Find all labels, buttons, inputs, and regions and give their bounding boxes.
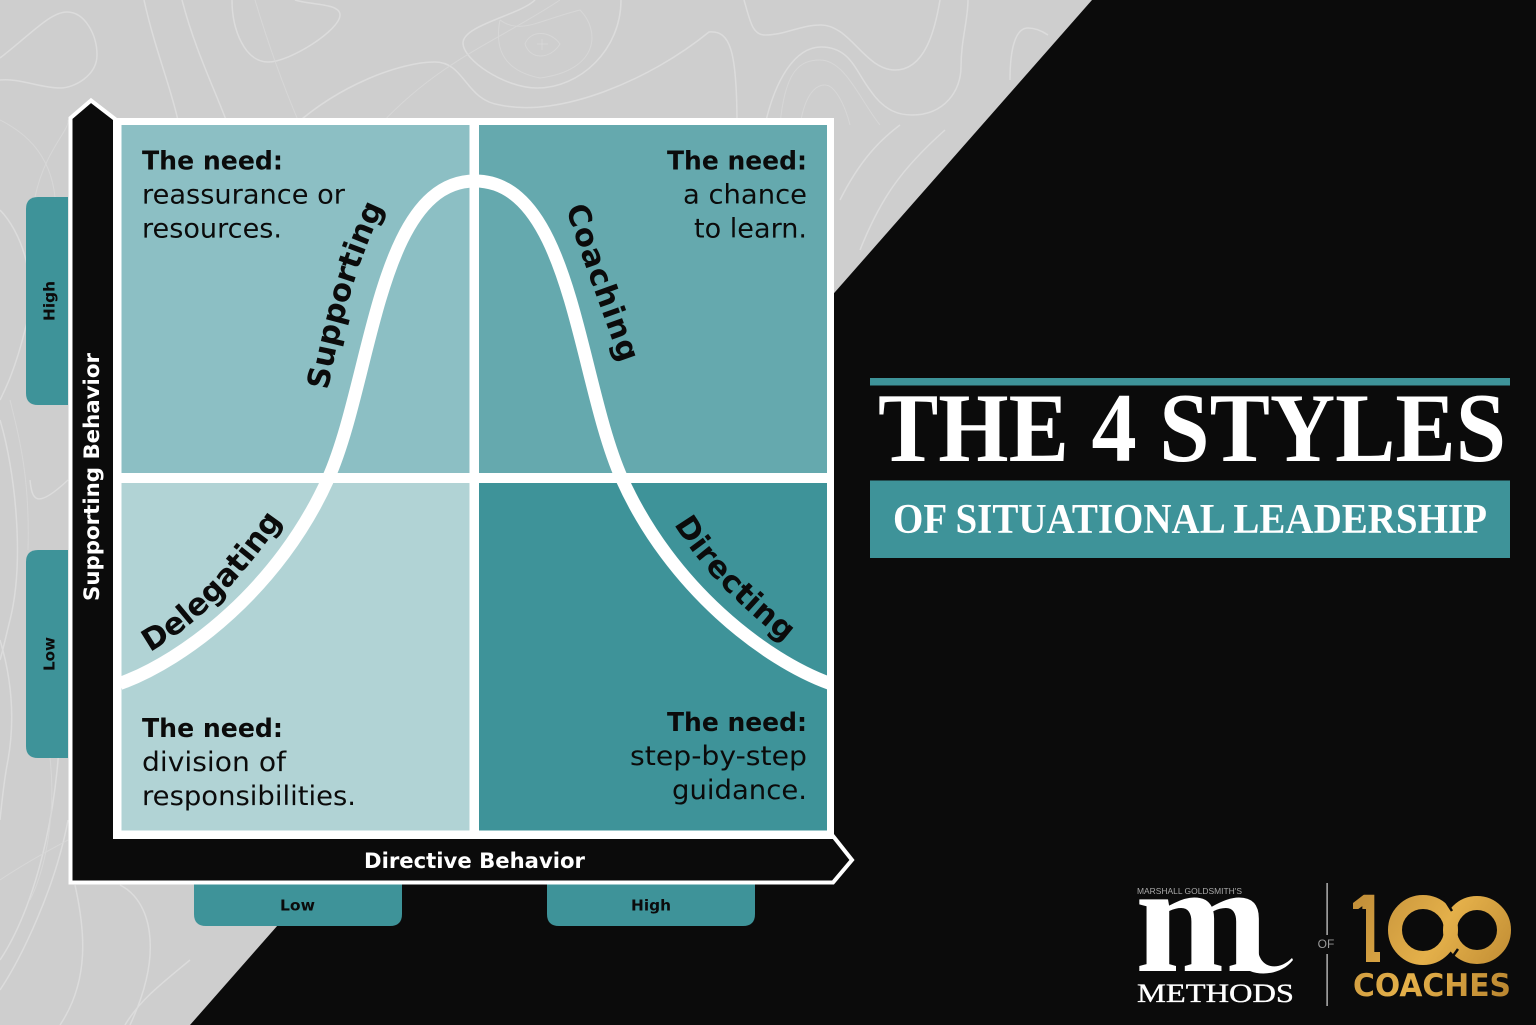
logo: 100 coaches: [1353, 894, 1511, 996]
tab: supporting behavior low: [26, 550, 68, 758]
icon: infinity zeros: [1395, 897, 1504, 963]
text: delegating need: division of: [142, 747, 287, 778]
logo: methods: MARSHALL GOLDSMITH'S: [1137, 886, 1242, 896]
matrix white frame: [113, 118, 834, 839]
bell curve: [120, 181, 830, 684]
text: supporting need: [142, 146, 345, 244]
y axis label: Supporting Behavior: [80, 352, 104, 601]
panel: delegating quadrant: [122, 483, 470, 830]
text: directing need: guidance.: [672, 775, 807, 806]
text: coaching need: [667, 146, 807, 244]
text: directing need: The need:: [667, 708, 807, 738]
title accent bar: [870, 378, 1510, 386]
label: supporting: Supporting: [307, 202, 386, 388]
label: delegating: Delegating: [140, 512, 283, 651]
tab: directive behavior low: [194, 884, 402, 926]
text: delegating need: [142, 714, 356, 812]
tab: supporting behavior low: Low: [40, 637, 58, 671]
tab: directive behavior high: High: [631, 896, 671, 914]
subtitle banner: OF SITUATIONAL LEADERSHIP: [893, 497, 1487, 543]
tab: directive behavior high: [547, 884, 755, 926]
text: coaching need: to learn.: [694, 214, 807, 244]
logo: 100 coaches: 1: [1342, 874, 1390, 983]
text: supporting need: resources.: [142, 214, 282, 244]
label: coaching: Coaching: [568, 205, 636, 362]
background: grey topographic triangle: [0, 0, 1092, 1025]
text: directing need: [630, 708, 807, 806]
panel: directing quadrant: [479, 483, 827, 830]
text: delegating need: responsibilities.: [142, 781, 356, 812]
text: delegating need: The need:: [142, 714, 283, 744]
text: coaching need: a chance: [683, 180, 807, 210]
tab: supporting behavior high: [26, 197, 68, 405]
logo: methods: METHODS: [1137, 979, 1294, 1008]
text: supporting need: The need:: [142, 146, 283, 176]
text: directing need: step-by-step: [630, 741, 807, 772]
x axis label: Directive Behavior: [364, 849, 586, 873]
text: coaching need: The need:: [667, 146, 807, 176]
subtitle banner: [870, 480, 1510, 558]
logo: methods: m: [1135, 832, 1269, 1005]
panel: supporting quadrant: [122, 125, 470, 473]
tab: directive behavior low: Low: [280, 896, 315, 914]
tab: supporting behavior high: High: [40, 281, 58, 321]
axes arrow frame: [70, 100, 852, 882]
logo divider: OF: [1318, 937, 1334, 951]
label: directing: Directing: [675, 514, 794, 642]
text: supporting need: reassurance or: [142, 180, 345, 210]
logo divider: [1318, 883, 1334, 1006]
panel: coaching quadrant: [479, 125, 827, 473]
logo: 100 coaches: COACHES: [1353, 968, 1511, 1004]
